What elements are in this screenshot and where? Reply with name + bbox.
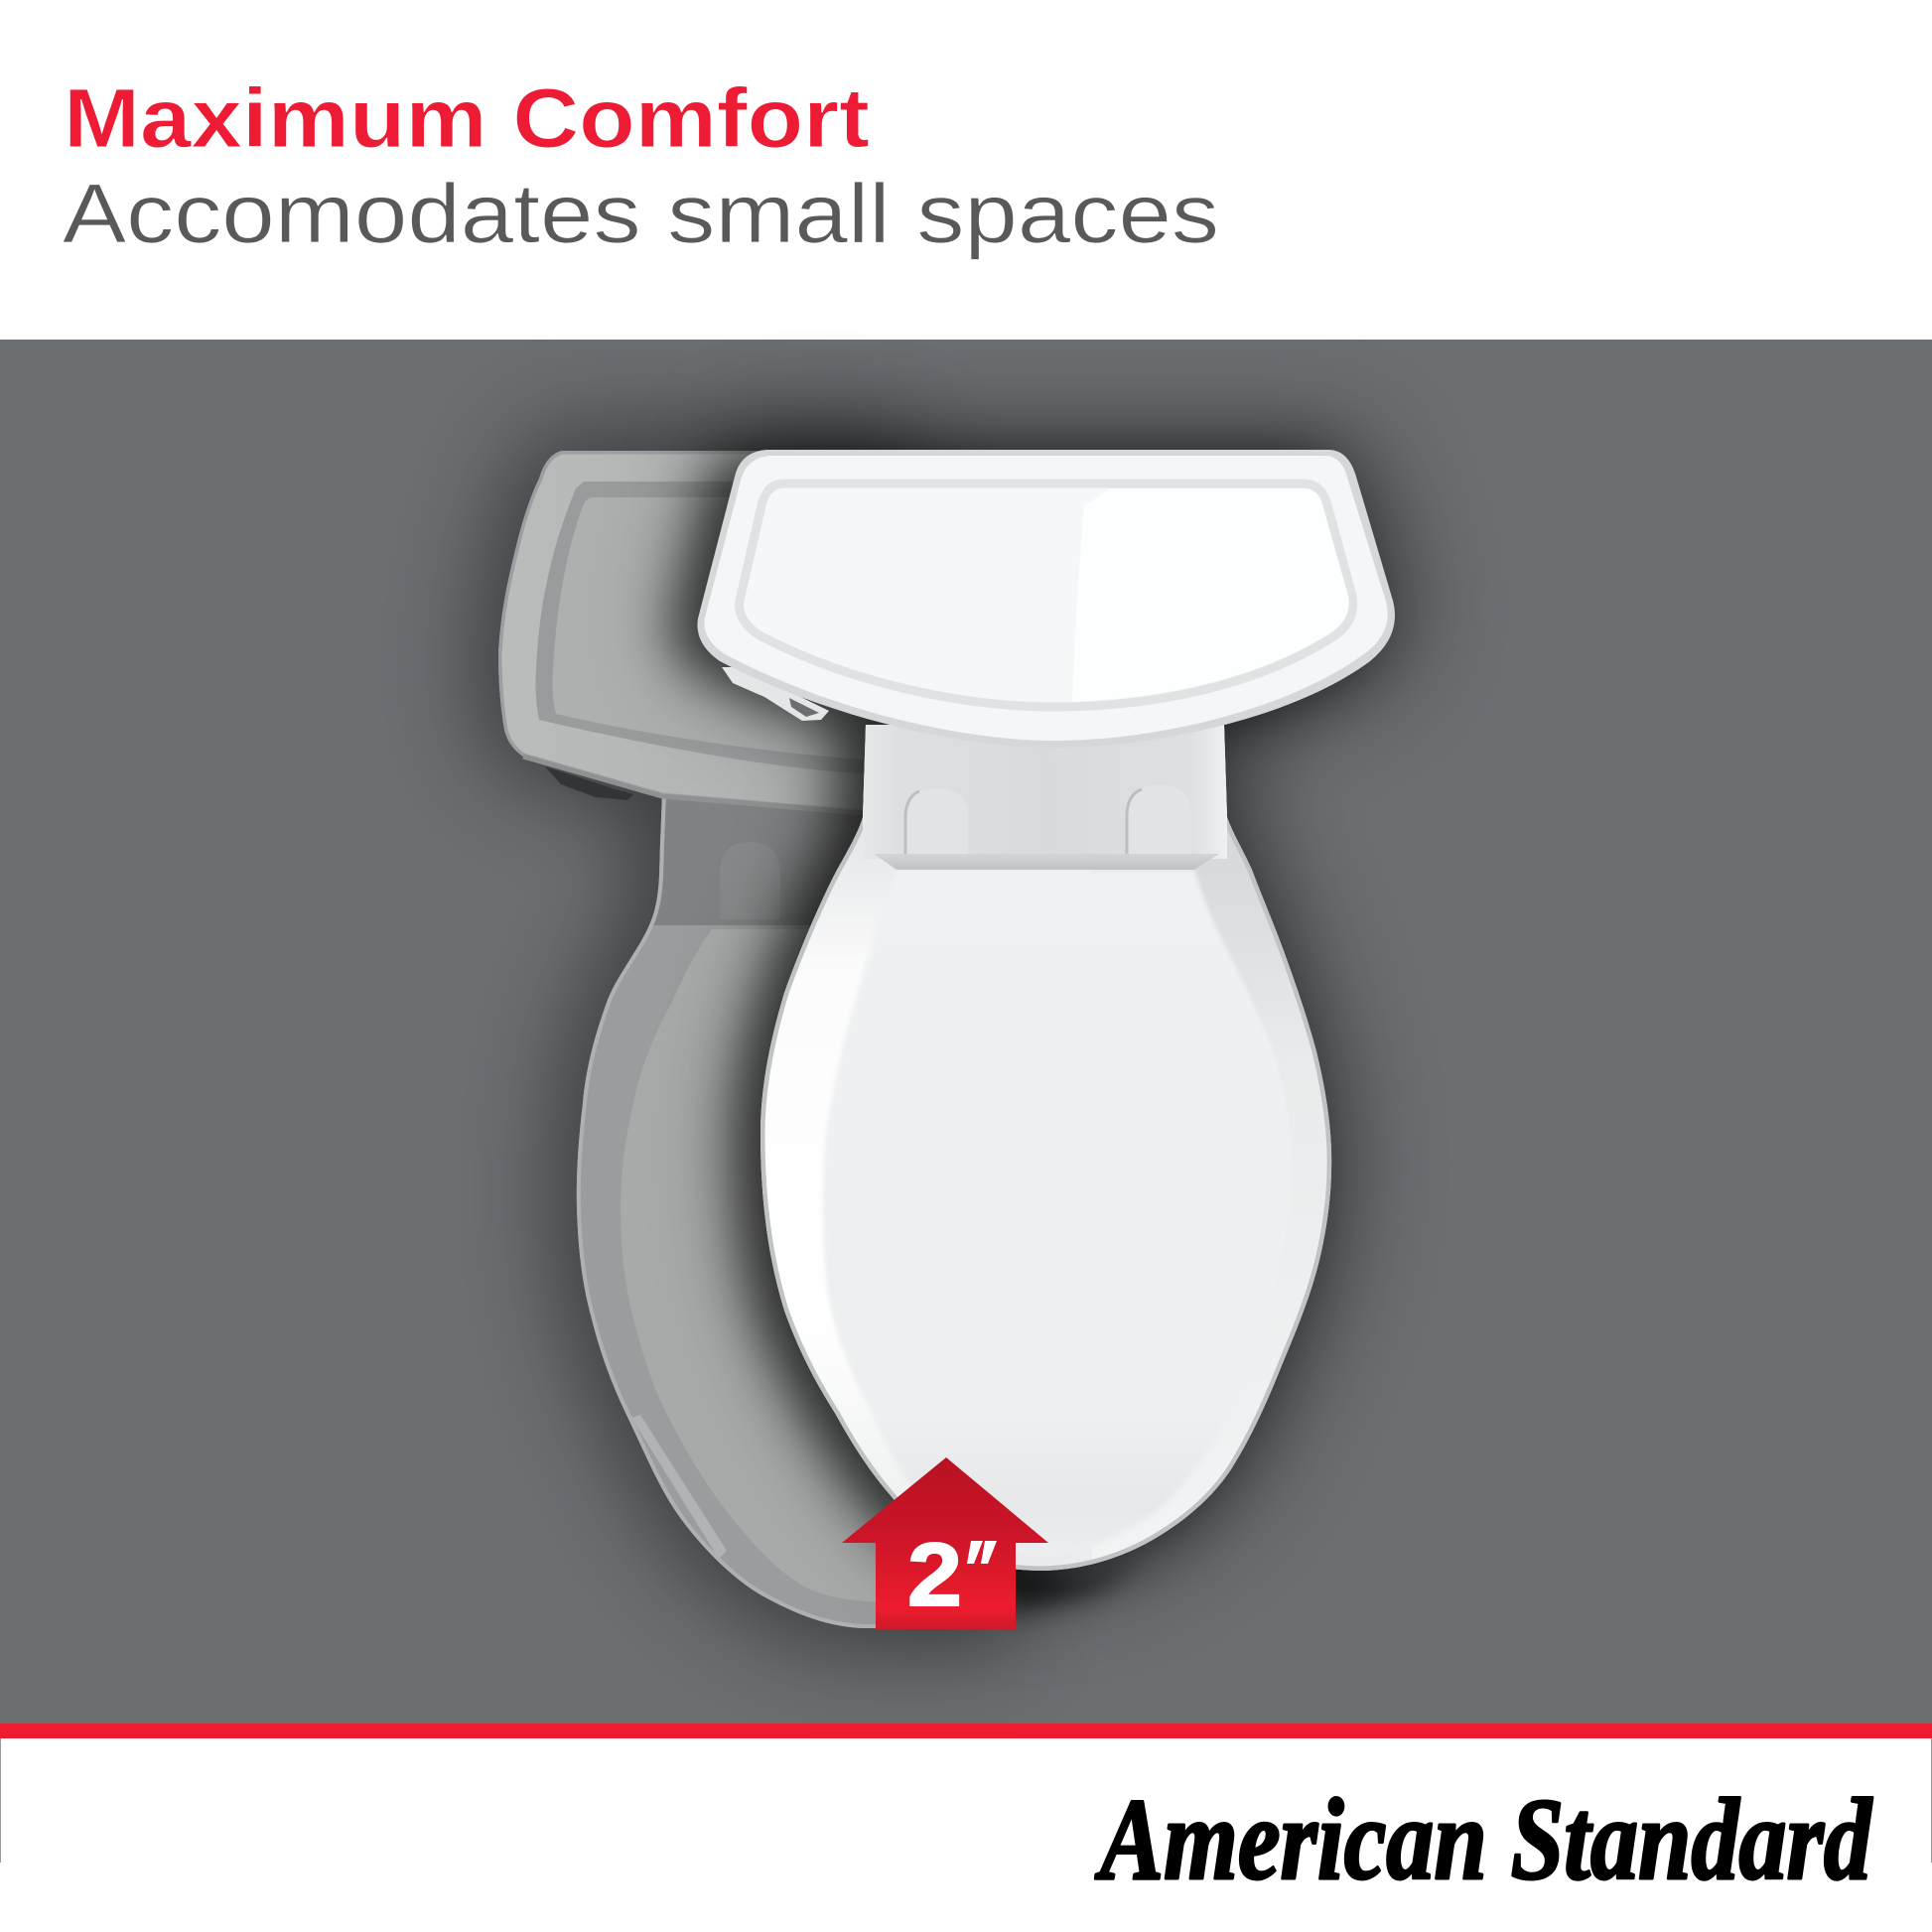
rear lid lower lip bbox=[523, 757, 864, 813]
inch marks bbox=[967, 1541, 997, 1564]
seat left half bbox=[755, 720, 1092, 1579]
lid inset ring and panel bbox=[740, 483, 1353, 707]
rear lid inset ring bbox=[536, 482, 854, 772]
shadow: cast onto rear toilet bbox=[671, 458, 1369, 1579]
lid reflection bbox=[1072, 488, 1349, 702]
arrow label: 2 bbox=[907, 1526, 962, 1625]
shadow: contact under seat bbox=[993, 1564, 1142, 1613]
footer edge line right bbox=[1931, 1738, 1932, 1863]
rear lid edge bbox=[498, 451, 843, 808]
lid outer shape bbox=[697, 450, 1395, 748]
title block bbox=[63, 71, 1219, 260]
hinge bar bbox=[874, 854, 1219, 870]
seat inner lid bbox=[823, 870, 1291, 1555]
red divider bar bbox=[0, 1724, 1932, 1738]
illustration: rear toilet (gray, original position) bbox=[486, 437, 1013, 1638]
rear seat lid bbox=[621, 929, 876, 1602]
rear flush hardware bbox=[545, 766, 633, 800]
rear seat and bowl bbox=[576, 798, 894, 1628]
right hinge edge bbox=[1127, 789, 1142, 854]
heading: Maximum Comfort: Maximum Comfort bbox=[64, 71, 870, 165]
arrow: 2 inch indicator bbox=[842, 1457, 1048, 1629]
rear seat highlight bbox=[631, 1415, 727, 1559]
subheading: Accomodates small spaces: Accomodates small spaces bbox=[63, 167, 1219, 260]
seat right half bbox=[1092, 720, 1340, 1579]
panel: dark gray backdrop bbox=[0, 340, 1932, 1724]
front seat and neck bbox=[755, 720, 1340, 1579]
rear seat rim bbox=[576, 798, 876, 1628]
left hinge edge bbox=[905, 791, 919, 854]
handle dark detail bbox=[789, 698, 819, 717]
shadow: cast by front toilet, broad bbox=[697, 450, 1395, 1571]
hinge neck bbox=[863, 720, 1227, 859]
tank lid bbox=[697, 450, 1395, 748]
footer edge line left bbox=[0, 1738, 1, 1863]
shadow: halo behind rear toilet bbox=[498, 451, 993, 1628]
illustration: front toilet (white, compact position) bbox=[697, 450, 1395, 1579]
rear lid inset panel bbox=[552, 497, 856, 759]
flush handle hardware bbox=[722, 667, 829, 721]
handle chrome bbox=[722, 667, 829, 721]
rear tank lid bbox=[498, 451, 890, 813]
rear neck bbox=[653, 799, 863, 925]
rear lid body bbox=[498, 451, 890, 810]
seat outer rim bbox=[760, 725, 1331, 1571]
right hinge cover bbox=[1127, 785, 1191, 854]
lid top face bbox=[704, 456, 1388, 741]
left hinge cover bbox=[905, 788, 968, 854]
arrow shape bbox=[842, 1457, 1048, 1629]
rear hinge cover bbox=[720, 842, 780, 919]
